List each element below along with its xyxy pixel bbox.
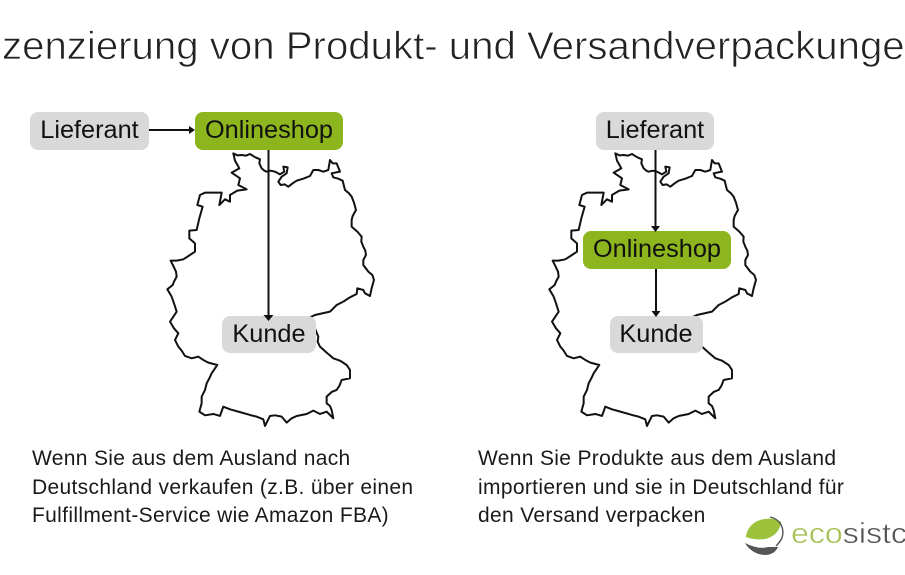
box: Kunde [610, 316, 703, 353]
box: Lieferant [30, 112, 149, 150]
text: left description: Deutschland verkaufen (z.B. über einen [32, 476, 413, 499]
logo: ecosistc [745, 517, 905, 555]
box: Kunde: Kunde [619, 320, 693, 348]
box: Lieferant [596, 112, 714, 150]
text: right description: importieren und sie in Deutschland für [478, 476, 844, 499]
box: Lieferant: Lieferant [40, 116, 139, 144]
arrow: Lieferant to Onlineshop [149, 126, 195, 134]
panel: left scenario [30, 112, 413, 527]
box: Lieferant: Lieferant [606, 116, 704, 144]
arrow: Onlineshop to Kunde [652, 269, 660, 317]
text: right description: den Versand verpacken [478, 504, 706, 527]
box: Onlineshop [195, 112, 343, 150]
box: Onlineshop: Onlineshop [593, 235, 721, 263]
box: Kunde: Kunde [232, 320, 306, 348]
text: left description: Fulfillment-Service wie Amazon FBA) [32, 504, 389, 527]
box: Onlineshop: Onlineshop [205, 116, 333, 144]
text: left description: Wenn Sie aus dem Ausland nach [32, 447, 351, 470]
box: Onlineshop [583, 231, 731, 269]
box: Kunde [222, 316, 316, 353]
title: zenzierung von Produkt- und Versandverpackungen [2, 25, 905, 68]
text: wordmark: ecosistc [791, 518, 905, 550]
arrow: Onlineshop to Kunde [264, 150, 274, 321]
arrow: Lieferant to Onlineshop [651, 150, 660, 232]
panel: right scenario [478, 112, 844, 527]
icon: leaf and hand [745, 517, 783, 555]
text: right description: Wenn Sie Produkte aus dem Ausland [478, 447, 836, 470]
map: Germany outline left [167, 153, 374, 426]
map: Germany outline right [549, 153, 756, 426]
